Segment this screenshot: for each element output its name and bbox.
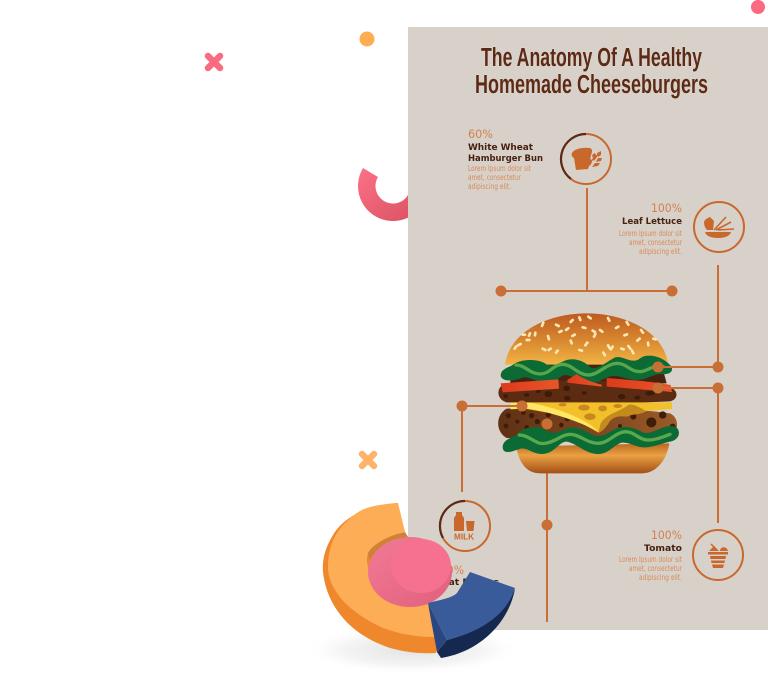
text block: leaf lettuce: Lorem Ipsum dolor sit (619, 229, 682, 238)
icon: basket in ring (693, 530, 743, 580)
panel: infographic poster (408, 27, 768, 630)
text block: white wheat hamburger bun: Hamburger Bun (468, 154, 543, 164)
top bun (505, 313, 668, 365)
text block: tomato: amet, consectetur (629, 564, 683, 573)
title (475, 44, 708, 99)
text block: leaf lettuce (619, 201, 683, 256)
text block: tomato: Tomato (644, 544, 682, 554)
ground shadow (306, 627, 518, 673)
sesame seeds (515, 317, 656, 355)
filling shadow (510, 365, 667, 383)
icon: salad bowl in ring (694, 202, 744, 252)
icon: milk bottle and glass in ring: MILK (454, 532, 475, 542)
orange segment top (328, 503, 440, 637)
text block: white wheat hamburger bun: Lorem Ipsum dolor sit (468, 164, 531, 173)
navy segment side (437, 589, 515, 658)
text block: partly hidden label: Meat Patties (433, 578, 499, 588)
icon: milk bottle and glass in ring (440, 501, 490, 551)
navy segment top (428, 572, 515, 640)
decoration: pink dot (751, 0, 765, 14)
bottom lettuce (503, 426, 679, 454)
decoration: orange dot (360, 32, 374, 46)
connector lines (496, 188, 678, 296)
text block: leaf lettuce: 100% (651, 201, 682, 215)
text block: white wheat hamburger bun: White Wheat (468, 143, 534, 153)
text block: white wheat hamburger bun: 60% (468, 127, 493, 141)
connector lines: left and bottom (456, 400, 552, 622)
icon: bread and wheat in progress ring (561, 134, 611, 184)
text block: partly hidden label (433, 563, 499, 588)
connector lines: right side (658, 265, 718, 523)
text block: tomato: adipiscing elit. (639, 573, 682, 582)
top patty (498, 381, 676, 403)
cheese (511, 402, 672, 433)
bottom bun (516, 443, 669, 473)
decoration: orange x mark (362, 454, 374, 466)
text block: leaf lettuce: Leaf Lettuce (622, 217, 682, 227)
text block: leaf lettuce: amet, consectetur (629, 238, 683, 247)
top lettuce (501, 356, 672, 384)
text block: partly hidden label: 100% (433, 563, 464, 577)
connector dots over burger (462, 362, 724, 430)
tomato slices (501, 379, 559, 392)
text block: tomato: Lorem Ipsum dolor sit (619, 555, 682, 564)
text block: white wheat hamburger bun: adipiscing elit. (468, 182, 511, 191)
text block: tomato: 100% (651, 528, 682, 542)
pink dome (368, 537, 452, 607)
illustration: cheeseburger (498, 313, 679, 473)
inner wall (368, 532, 410, 560)
text block: white wheat hamburger bun (468, 127, 543, 191)
decoration: pink x mark (208, 56, 220, 68)
text block: tomato (619, 528, 683, 582)
text block: leaf lettuce: adipiscing elit. (639, 247, 682, 256)
decoration: pink ring (358, 168, 428, 221)
text block: white wheat hamburger bun: amet, consectetur (468, 173, 522, 182)
orange segment side (323, 503, 441, 653)
bottom patty (498, 408, 677, 439)
3D donut chart (306, 503, 518, 673)
